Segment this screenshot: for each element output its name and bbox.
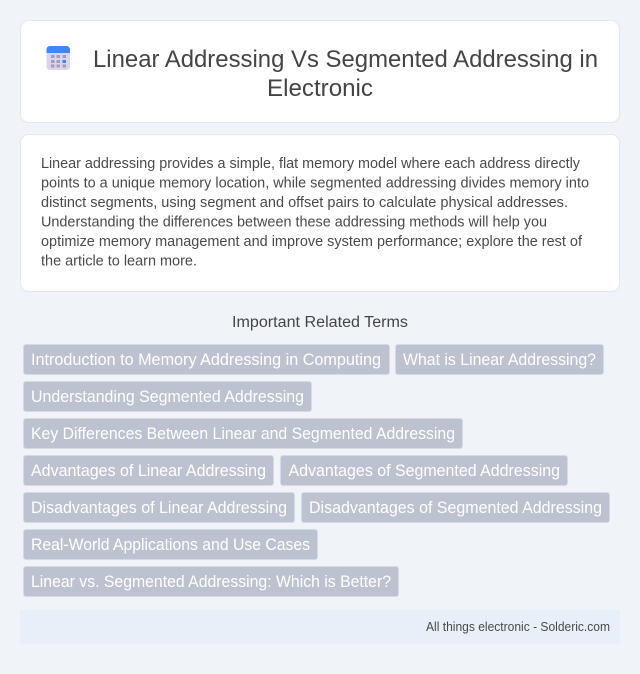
intro paragraph: points to a unique memory location, while segmented addressing divides memory into	[41, 176, 589, 192]
icon: calendar	[46, 46, 70, 70]
tag	[24, 530, 318, 560]
intro paragraph: Linear addressing provides a simple, flat memory model where each address directly	[41, 156, 581, 172]
tag	[24, 418, 462, 448]
tag	[302, 492, 610, 522]
tag	[24, 492, 294, 522]
title: Linear Addressing Vs Segmented Addressing in	[93, 46, 598, 73]
heading: important related terms: Important Related Terms	[232, 314, 408, 331]
tag: What is Linear Addressing?	[403, 350, 596, 369]
panel: intro text card	[20, 134, 620, 292]
tag	[24, 566, 398, 596]
tag: Advantages of Segmented Addressing	[288, 461, 560, 480]
tag: Key Differences Between Linear and Segmented Addressing	[31, 424, 455, 443]
intro paragraph: distinct segments, using segment and offset pairs to calculate physical addresses.	[41, 195, 568, 211]
tag: Disadvantages of Linear Addressing	[31, 498, 287, 517]
tag	[24, 382, 312, 412]
tag: Linear vs. Segmented Addressing: Which is Better?	[31, 572, 391, 591]
tag	[24, 456, 274, 486]
tag: Disadvantages of Segmented Addressing	[309, 498, 602, 517]
tag	[396, 344, 604, 374]
title: Electronic	[267, 75, 373, 102]
tag: Advantages of Linear Addressing	[31, 461, 266, 480]
tag	[24, 344, 390, 374]
intro paragraph: the article to learn more.	[41, 254, 197, 270]
panel: header card	[20, 20, 620, 122]
footer credit: All things electronic - Solderic.com	[426, 620, 610, 634]
tag: Real-World Applications and Use Cases	[31, 535, 310, 554]
panel: related term tags	[24, 344, 610, 596]
intro paragraph: Understanding the differences between these addressing methods will help you	[41, 214, 547, 230]
tag: Introduction to Memory Addressing in Computing	[31, 350, 381, 369]
tag: Understanding Segmented Addressing	[31, 387, 304, 406]
footer	[20, 610, 620, 644]
intro paragraph: optimize memory management and improve system performance; explore the rest of	[41, 234, 583, 250]
tag	[280, 456, 568, 486]
